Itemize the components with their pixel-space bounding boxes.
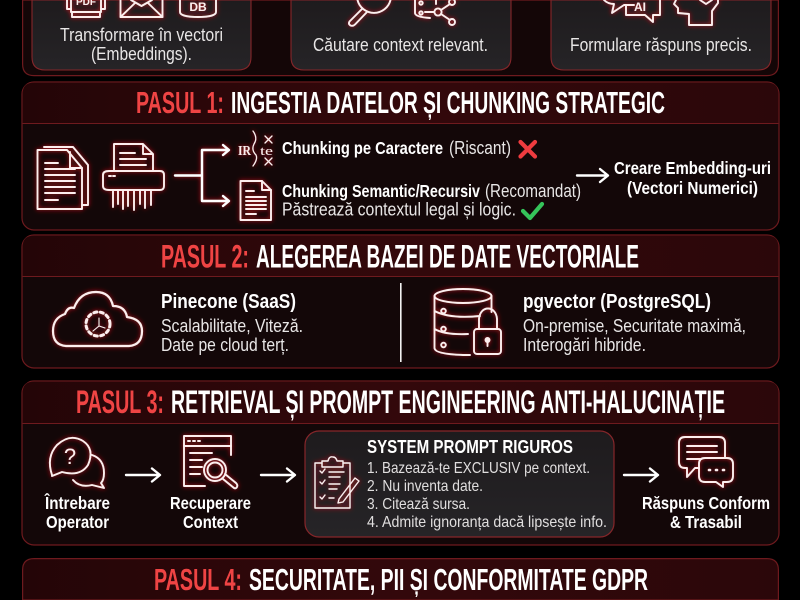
icon: semantic document: [240, 181, 271, 220]
panel: step 1: [22, 82, 779, 230]
icon: question chat: ?: [64, 444, 76, 469]
panel: step 2: [22, 235, 779, 368]
heading: step 4: PASUL 4:: [154, 562, 242, 597]
icon: database: DB: [189, 0, 207, 14]
icon: magnifier: [349, 0, 390, 26]
text: pgvector: [523, 291, 746, 355]
icon: question chat: [50, 438, 104, 488]
panel: step 4: [23, 559, 778, 600]
text: prompt rules: 4. Admite ignoranța dacă lipsește info.: [367, 514, 607, 531]
icon: cloud: [53, 292, 142, 346]
heading: step 2: [161, 238, 639, 274]
text: embeddings caption: [60, 25, 223, 64]
icon: database: [180, 0, 216, 17]
heading: step 3: PASUL 3:: [76, 384, 164, 420]
text: embeddings caption: Transformare în vectori: [60, 25, 223, 45]
icon: broken text: [238, 131, 273, 166]
text: context recovery: Recuperare: [170, 493, 251, 513]
panel: step 3: [22, 381, 779, 545]
arrow: split: [175, 145, 229, 206]
text: pinecone: [161, 291, 303, 355]
text: create embeddings: Creare Embedding-uri: [614, 158, 771, 178]
text: operator question: Operator: [46, 512, 109, 532]
text: semantic chunking: Păstrează contextul legal și logic.: [282, 200, 516, 220]
icon: context browser: [184, 436, 237, 488]
heading: step 1: PASUL 1:: [136, 85, 224, 120]
text: create embeddings: [614, 158, 771, 198]
icon: network database: [415, 0, 455, 25]
text: semantic chunking: (Recomandat): [485, 181, 581, 201]
card: embeddings: [32, 0, 251, 70]
icon: AI chat: AI: [634, 0, 646, 14]
text: pgvector: On-premise, Securitate maximă,: [523, 316, 746, 336]
text: pgvector: Interogări hibride.: [523, 335, 646, 355]
text: pinecone: Pinecone (SaaS): [161, 291, 296, 313]
text: semantic chunking: Chunking Semantic/Recursiv: [282, 181, 480, 201]
text: prompt rules: 3. Citează sursa.: [367, 496, 470, 513]
arrow: to prompt: [261, 468, 295, 482]
icon: green check: [523, 204, 542, 218]
text: prompt title: SYSTEM PROMPT RIGUROS: [367, 437, 573, 457]
text: character chunking: (Riscant): [449, 138, 511, 158]
text: operator question: Întrebare: [44, 492, 110, 513]
text: semantic chunking: [282, 181, 581, 220]
icon: clipboard: [315, 457, 359, 508]
text: compliant answer: & Trasabil: [670, 512, 742, 532]
card: context search: [291, 0, 511, 70]
card: system prompt: [305, 431, 614, 537]
text: compliant answer: Răspuns Conform: [642, 493, 770, 513]
heading: step 1: [136, 85, 665, 120]
text: embeddings caption: (Embeddings).: [91, 44, 192, 64]
text: context recovery: Context: [183, 512, 238, 532]
text: prompt rules: 1. Bazează-te EXCLUSIV pe context.: [367, 460, 590, 477]
card: precise answer: [551, 0, 771, 70]
text: pgvector: pgvector (PostgreSQL): [523, 291, 711, 313]
arrow: to context: [126, 468, 160, 482]
icon: answer chat: [679, 437, 733, 487]
heading: step 4: [154, 562, 648, 597]
icon: head: [674, 0, 718, 25]
icon: red x: [520, 142, 535, 156]
icon: database lock: [434, 289, 501, 355]
text: compliant answer: [642, 493, 770, 532]
text: prompt rules: [367, 460, 607, 531]
icon: documents: [38, 147, 88, 209]
icon: PDF document: [67, 0, 105, 17]
icon: broken text: IR: [238, 144, 252, 159]
icon: envelope: [120, 0, 162, 17]
icon: AI chat: [604, 0, 660, 22]
icon: shredder: [103, 144, 164, 210]
text: character chunking: Chunking pe Caractere: [282, 138, 443, 158]
icon: broken text: te: [260, 143, 273, 158]
text: create embeddings: (Vectori Numerici): [627, 178, 758, 198]
arrow: to embeddings: [577, 169, 608, 182]
text: prompt rules: 2. Nu inventa date.: [367, 478, 483, 495]
text: pinecone: Date pe cloud terț.: [161, 335, 289, 355]
arrow: to answer: [624, 468, 658, 482]
panel: overview: [23, 0, 778, 76]
heading: step 2: PASUL 2:: [161, 238, 249, 274]
text: search caption: Căutare context relevant.: [313, 35, 488, 55]
text: pinecone: Scalabilitate, Viteză.: [161, 316, 303, 336]
text: operator question: [44, 492, 110, 532]
text: context recovery: [170, 493, 251, 532]
text: answer caption: Formulare răspuns precis.: [570, 35, 752, 55]
